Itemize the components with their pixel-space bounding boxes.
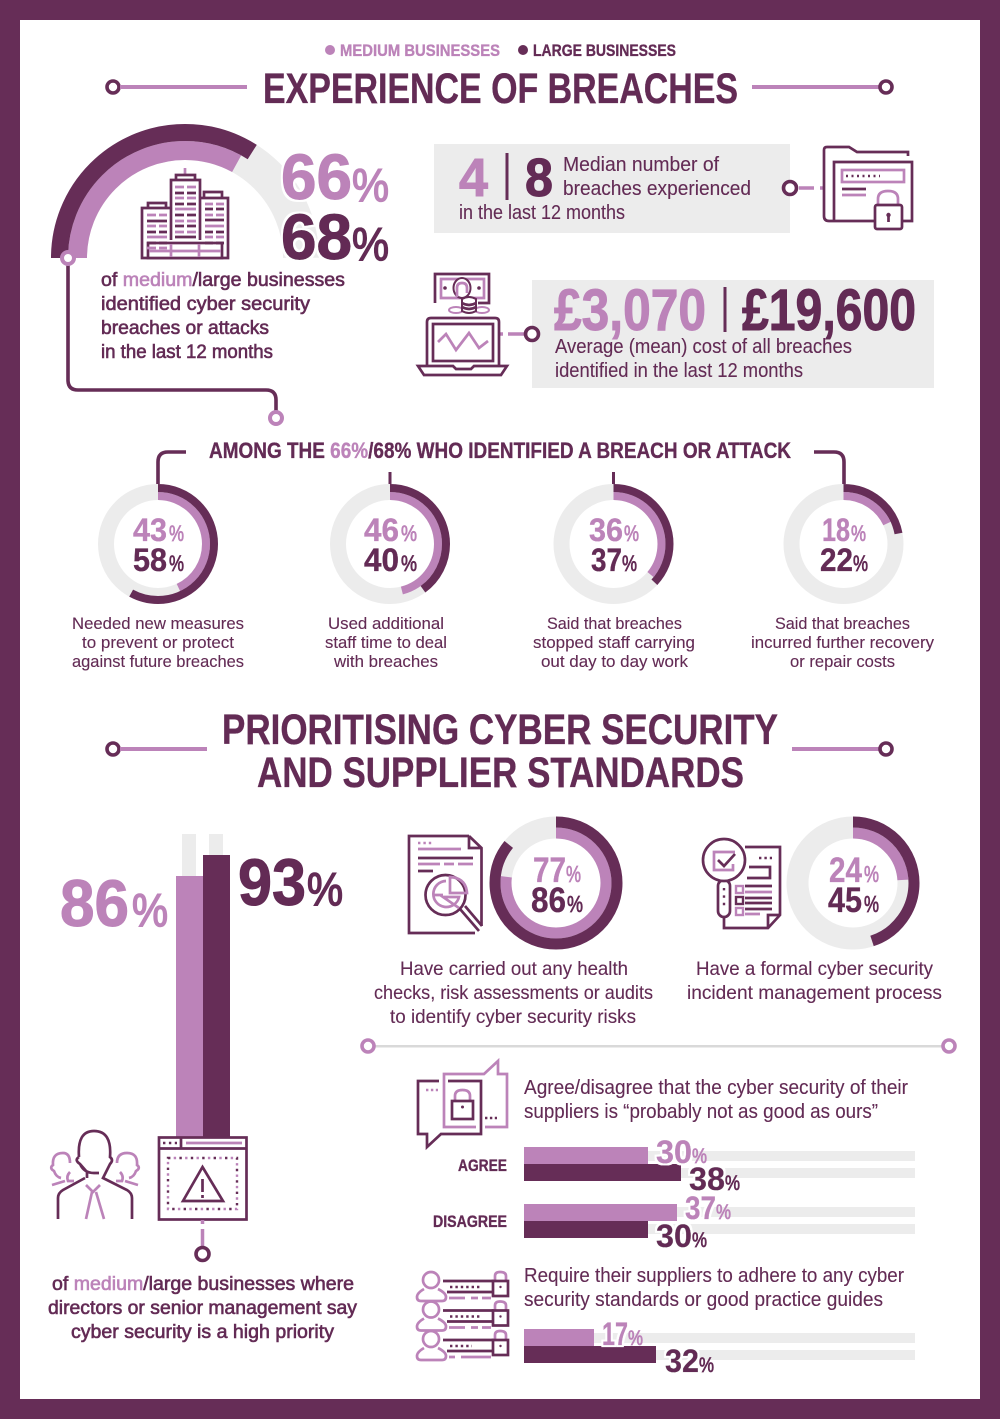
question text <box>524 1077 908 1123</box>
caption: or repair costs <box>790 652 895 671</box>
panel: median number of breaches: Median number of <box>563 154 719 176</box>
bar row: require standards: % <box>699 1354 714 1377</box>
donut: recovery or repair costs: 22 <box>820 542 853 578</box>
icon: document with magnifier <box>409 836 482 933</box>
donut <box>792 822 914 944</box>
panel: average cost of breaches: £3,070 <box>554 278 706 343</box>
panel: identified breaches 66% / 68% <box>60 132 389 424</box>
legend: LARGE BUSINESSES <box>533 42 676 60</box>
bar row: disagree: % <box>692 1229 707 1252</box>
panel: incident management <box>687 822 942 1004</box>
bar row: agree: 38 <box>689 1161 725 1197</box>
caption: Have a formal cyber security <box>696 958 933 980</box>
legend <box>325 42 676 60</box>
panel: health checks <box>374 822 653 1028</box>
description: cyber security is a high priority <box>71 1322 335 1343</box>
description: directors or senior management say <box>48 1298 357 1319</box>
stats: 77 <box>533 851 566 890</box>
icon: locked folder <box>824 147 912 229</box>
description <box>101 270 345 363</box>
caption: incurred further recovery <box>751 633 934 652</box>
stats: 86 <box>531 881 566 920</box>
donut: stopped day to day work: % <box>624 521 639 546</box>
stat 66%: % <box>352 159 389 211</box>
connector line <box>68 264 276 411</box>
caption <box>72 614 244 671</box>
donut: needed new measures <box>72 488 244 671</box>
stat 68%: 68 <box>281 201 352 273</box>
donut: additional staff time: 46 <box>364 512 399 548</box>
donut: needed new measures: % <box>169 521 184 546</box>
panel: average cost of breaches: identified in the last 12 months <box>555 360 803 382</box>
icon: suppliers with locks <box>417 1272 508 1360</box>
donut: stopped day to day work: 37 <box>591 542 622 578</box>
icon: checklist with magnifier <box>703 839 780 928</box>
donut: additional staff time: 40 <box>364 542 399 578</box>
caption: staff time to deal <box>325 633 447 652</box>
icon: alert window <box>159 1138 246 1260</box>
bar row: require standards: 17 <box>602 1316 628 1352</box>
heading: experience of breaches: EXPERIENCE OF BREACHES <box>263 65 738 113</box>
caption: to identify cyber security risks <box>390 1006 636 1028</box>
question text: security standards or good practice guides <box>524 1289 883 1311</box>
donut: stopped day to day work: % <box>622 551 637 576</box>
description: breaches or attacks <box>101 318 269 339</box>
subheading: among the 66%/68% <box>158 438 844 484</box>
panel: supplier standards <box>417 1265 915 1379</box>
panel: median number of breaches: breaches experienced <box>563 178 751 200</box>
bar row: require standards: 32 <box>665 1343 699 1379</box>
legend: MEDIUM BUSINESSES <box>340 42 500 60</box>
caption: Said that breaches <box>775 614 910 633</box>
donut: needed new measures: 43 <box>133 512 167 548</box>
caption <box>751 614 934 671</box>
description: of medium/large businesses <box>101 270 345 291</box>
bar row: require standards: % <box>628 1327 643 1350</box>
description: of medium/large businesses where <box>52 1274 354 1295</box>
stat 93%: % <box>307 863 343 915</box>
stat 66% <box>281 141 389 213</box>
question text <box>524 1265 904 1311</box>
icon: laptop with money <box>418 274 507 375</box>
bar row: disagree: DISAGREE <box>433 1212 507 1231</box>
panel: average cost of breaches: £19,600 <box>742 278 916 343</box>
bar row: disagree: 30 <box>656 1218 692 1254</box>
stat 93% <box>238 845 343 919</box>
stat 86% <box>60 866 168 940</box>
description: in the last 12 months <box>101 342 273 363</box>
stats: 45 <box>828 881 862 920</box>
subheading: among the 66%/68%: AMONG THE 66%/68% WHO IDENTIFIED A BREACH OR ATTACK <box>209 438 791 463</box>
stat 86%: 86 <box>60 866 129 940</box>
panel: average cost of breaches <box>418 274 934 388</box>
heading: prioritising cyber security: AND SUPPLIER STANDARDS <box>257 749 744 797</box>
question text: suppliers is “probably not as good as ours” <box>524 1101 878 1123</box>
donut: additional staff time: % <box>401 551 417 576</box>
donut: stopped day to day work <box>533 488 695 671</box>
caption: to prevent or protect <box>82 633 234 652</box>
stats <box>828 851 879 920</box>
stats: 24 <box>829 851 862 890</box>
panel: median number of breaches: 4 <box>459 148 488 208</box>
donut <box>495 822 617 944</box>
panel: suppliers' cyber security opinion <box>418 1061 915 1254</box>
caption: incident management process <box>687 982 942 1004</box>
vertical bars <box>176 834 230 1138</box>
half ring gauge <box>60 132 310 384</box>
caption: against future breaches <box>72 652 244 671</box>
icon: chat bubbles with lock <box>418 1061 507 1147</box>
bar row: agree: 30 <box>656 1134 692 1170</box>
donut: recovery or repair costs <box>751 488 934 671</box>
divider <box>362 1040 955 1052</box>
question text: Agree/disagree that the cyber security of their <box>524 1077 908 1099</box>
stats: % <box>567 891 583 917</box>
caption <box>687 958 942 1004</box>
bar row: agree <box>458 1134 915 1197</box>
caption: Used additional <box>328 614 444 633</box>
donut: stopped day to day work: 36 <box>589 512 623 548</box>
description <box>48 1274 357 1343</box>
caption <box>325 614 447 671</box>
caption: out day to day work <box>541 652 688 671</box>
caption: Said that breaches <box>547 614 682 633</box>
panel: median number of breaches: in the last 12 months <box>459 202 625 224</box>
caption: with breaches <box>333 652 438 671</box>
caption: Needed new measures <box>72 614 244 633</box>
donut: recovery or repair costs: 18 <box>822 512 850 548</box>
heading: prioritising cyber security: PRIORITISING CYBER SECURITY <box>222 706 778 754</box>
stat 93%: 93 <box>238 845 306 919</box>
question text: Require their suppliers to adhere to any cyber <box>524 1265 904 1287</box>
stats: % <box>566 861 581 887</box>
bar row: agree: % <box>692 1145 707 1168</box>
caption: Have carried out any health <box>400 958 628 980</box>
panel: average cost of breaches: Average (mean) cost of all breaches <box>555 336 852 358</box>
connector <box>500 332 526 336</box>
donut: needed new measures: 58 <box>133 542 167 578</box>
heading: prioritising cyber security <box>107 706 892 797</box>
donut: additional staff time <box>325 488 447 671</box>
stat 68% <box>281 201 389 273</box>
donut: recovery or repair costs: % <box>853 551 868 576</box>
caption: stopped staff carrying <box>533 633 695 652</box>
icon: office buildings <box>142 168 228 258</box>
caption <box>533 614 695 671</box>
stat 68%: % <box>352 218 389 270</box>
bar row: disagree: 37 <box>685 1190 716 1226</box>
bar row: agree: % <box>725 1172 740 1195</box>
stats <box>531 851 583 920</box>
donut: recovery or repair costs: % <box>851 521 866 546</box>
description: identified cyber security <box>101 294 311 315</box>
panel: median number of breaches: 8 <box>525 148 553 208</box>
stats: % <box>864 861 879 887</box>
connector <box>799 186 825 190</box>
panel: high priority bar chart <box>48 834 357 1343</box>
panel: median number of breaches <box>434 144 912 233</box>
stat 66%: 66 <box>281 141 352 213</box>
stats: % <box>864 891 879 917</box>
stat 86%: % <box>132 884 168 936</box>
icon: executives <box>51 1131 139 1219</box>
donut: needed new measures: % <box>169 551 184 576</box>
bar row: require standards <box>524 1316 915 1379</box>
bar row: disagree <box>433 1190 915 1254</box>
donut: additional staff time: % <box>401 521 417 546</box>
caption: checks, risk assessments or audits <box>374 982 653 1004</box>
bar row: disagree: % <box>716 1201 731 1224</box>
bar row: agree: AGREE <box>458 1156 507 1175</box>
caption <box>374 958 653 1028</box>
